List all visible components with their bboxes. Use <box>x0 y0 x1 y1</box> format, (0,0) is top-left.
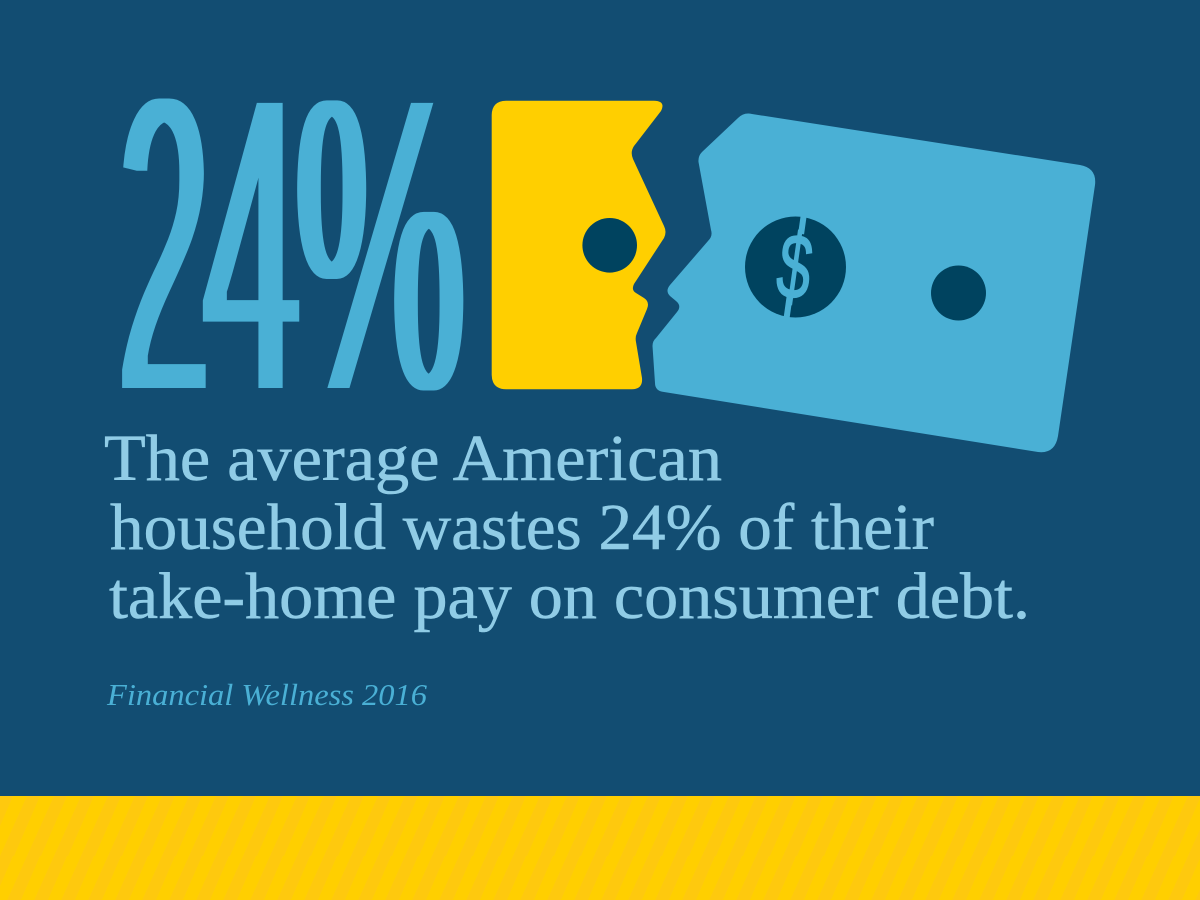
coin <box>745 214 846 320</box>
headline text: The average American <box>104 422 722 495</box>
headline text: take-home pay on consumer debt. <box>109 560 1030 633</box>
striped yellow footer band <box>0 796 1200 900</box>
icon: yellow face with open mouth <box>492 101 666 389</box>
headline text <box>104 422 1030 633</box>
big number: 24%: % <box>295 6 465 482</box>
big number: 24%: 4 <box>204 6 299 483</box>
big number: 24% <box>119 6 465 483</box>
icon: bitten dollar bill <box>652 114 1095 452</box>
big number: 24%: 2 <box>119 7 209 483</box>
dollar sign: $ <box>771 215 818 320</box>
source credit: Financial Wellness 2016 <box>106 677 428 712</box>
headline text: household wastes 24% of their <box>110 491 934 564</box>
